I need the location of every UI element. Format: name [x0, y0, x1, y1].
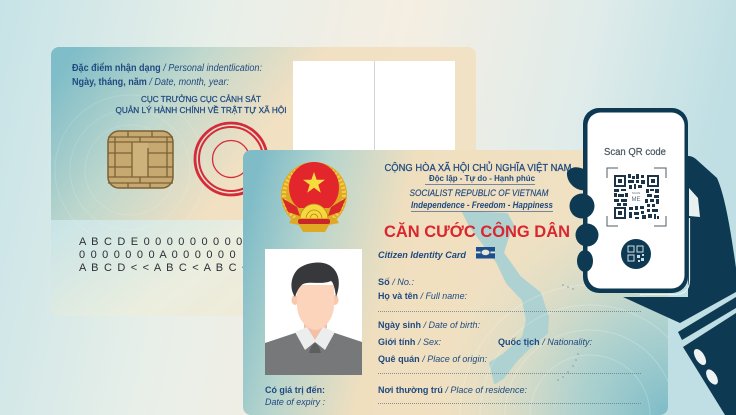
phone: [583, 108, 690, 294]
portrait photo: [265, 249, 362, 375]
national header text: Independence - Freedom - Happiness: [411, 200, 553, 210]
back card identification text: Ngày, tháng, năm / Date, month, year:: [72, 77, 229, 88]
panel: front of ID card: [243, 150, 668, 415]
personal data fields: Nơi thường trú / Place of residence:: [378, 385, 527, 396]
hand palm: [623, 156, 736, 323]
personal data fields: Ngày sinh / Date of birth:: [378, 320, 480, 331]
cuff buttons: [691, 347, 720, 387]
personal data fields: Quê quán / Place of origin:: [378, 354, 487, 365]
phone: Scan QR code: [604, 147, 666, 158]
panel: back of ID card: [51, 47, 476, 316]
QR code: SCAN: [632, 191, 640, 195]
issuing authority text: QUẢN LÝ HÀNH CHÍNH VỀ TRẬT TỰ XÃ HỘI: [116, 104, 286, 115]
machine readable zone: [79, 236, 261, 274]
expiry label: Date of expiry :: [265, 397, 325, 408]
national header text: SOCIALIST REPUBLIC OF VIETNAM: [410, 188, 549, 198]
national header text: [384, 161, 572, 212]
personal data fields: Họ và tên / Full name:: [378, 291, 467, 302]
issuing authority text: [116, 93, 286, 115]
fingers: [567, 167, 598, 272]
machine readable zone: 0 0 0 0 0 0 0 A 0 0 0 0 0 0: [79, 249, 237, 261]
scan button icon: [621, 239, 651, 269]
issuing authority text: CỤC TRƯỞNG CỤC CẢNH SÁT: [141, 93, 261, 104]
icon: hand holding phone: [567, 108, 736, 415]
jacket sleeve: [683, 313, 736, 415]
Vietnam map silhouette: [463, 212, 548, 383]
icon: red seal: [195, 123, 267, 195]
icon: chip: [108, 131, 173, 188]
QR code: ME: [632, 197, 640, 203]
icon: national emblem: [281, 162, 347, 232]
machine readable zone: A B C D E 0 0 0 0 0 0 0 0 0: [79, 236, 243, 248]
machine readable zone: A B C D < < A B C < A B C < <: [79, 262, 261, 274]
back card identification text: [72, 62, 262, 88]
back card identification text: Đặc điểm nhận dạng / Personal indentlication:: [72, 62, 262, 74]
personal data fields: [378, 277, 592, 396]
national header text: CỘNG HÒA XÃ HỘI CHỦ NGHĨA VIỆT NAM: [384, 161, 572, 174]
expiry label: Có giá trị đến:: [265, 385, 325, 396]
jacket cuff: [678, 297, 736, 340]
icon: contactless chip mark: [476, 247, 495, 258]
personal data fields: Số / No.:: [378, 277, 414, 288]
QR code: [607, 168, 666, 226]
national header text: Độc lập - Tự do - Hạnh phúc: [429, 173, 535, 183]
personal data fields: Quốc tịch / Nationality:: [498, 337, 592, 348]
personal data fields: Giới tính / Sex:: [378, 337, 441, 348]
card subtitle: Citizen Identity Card: [378, 250, 466, 261]
expiry label: [265, 385, 325, 408]
fingerprint boxes: [293, 61, 455, 171]
card title: CĂN CƯỚC CÔNG DÂN: [384, 222, 570, 241]
